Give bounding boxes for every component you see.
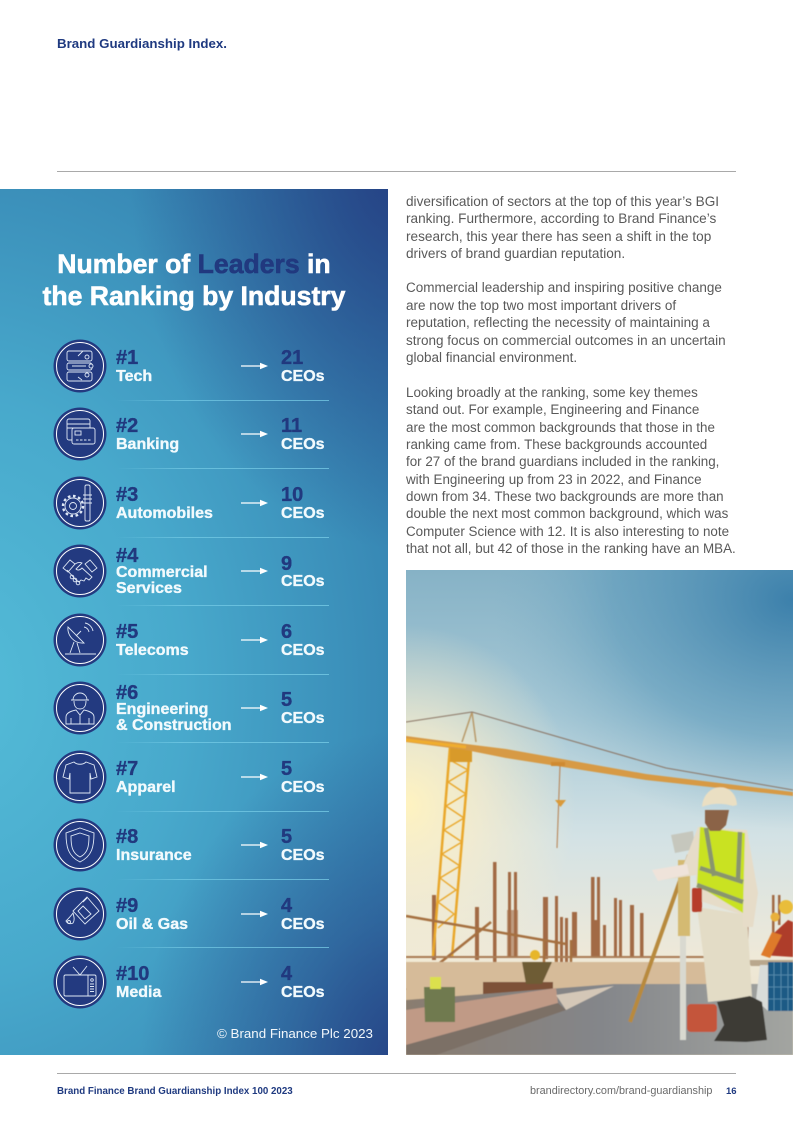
row 7: Apparel xyxy=(54,750,325,804)
row 6: Engineering & Construction: #6 xyxy=(116,682,138,704)
row 6: Engineering & Construction: 5 xyxy=(281,689,292,711)
mid worker xyxy=(530,950,540,960)
row 9: Oil & Gas xyxy=(54,888,325,940)
row 10: Media xyxy=(54,956,325,1008)
panel heading: the Ranking by Industry xyxy=(43,281,345,311)
boots xyxy=(714,996,767,1042)
arrow xyxy=(241,636,268,644)
row 6: Engineering & Construction xyxy=(54,682,325,734)
arrow xyxy=(241,362,268,370)
row 6: Engineering & Construction: Engineering xyxy=(116,701,208,718)
body text paragraph 2 xyxy=(406,280,726,365)
vest xyxy=(697,827,745,913)
row 2: Banking xyxy=(54,408,325,460)
row 3: Automobiles: #3 xyxy=(116,484,138,506)
header title: Brand Guardianship Index. xyxy=(57,36,227,51)
row 7: Apparel: Apparel xyxy=(116,779,176,796)
row 3: Automobiles xyxy=(54,476,325,530)
icon: television xyxy=(54,956,106,1008)
body text paragraph 2: global financial environment. xyxy=(406,350,577,365)
row 5: Telecoms: 6 xyxy=(281,621,292,643)
row 3: Automobiles: Automobiles xyxy=(116,505,213,522)
arrow xyxy=(241,910,268,918)
body text paragraph 2: Commercial leadership and inspiring positive change xyxy=(406,280,722,295)
row 2: Banking: 11 xyxy=(281,415,302,437)
icon: shield xyxy=(54,818,106,872)
row 4: Commercial Services xyxy=(54,544,325,598)
body text paragraph 3: ranking came from. These backgrounds accounted xyxy=(406,437,707,452)
row 7: Apparel: 5 xyxy=(281,758,292,780)
rebar columns xyxy=(432,862,780,982)
row 9: Oil & Gas: #9 xyxy=(116,895,138,917)
body text paragraph 3: Looking broadly at the ranking, some key themes xyxy=(406,385,698,400)
row 5: Telecoms: CEOs xyxy=(281,642,325,659)
body text paragraph 1: ranking. Furthermore, according to Brand Finance’s xyxy=(406,211,716,226)
arrow xyxy=(241,774,268,780)
body text paragraph 2: are now the top two most important drivers of xyxy=(406,298,676,312)
scaffold poles xyxy=(406,916,726,995)
row 10: Media: 4 xyxy=(281,963,292,985)
photo: surveyor on construction site with crane xyxy=(406,570,793,1055)
icon: construction worker xyxy=(54,682,106,734)
row 8: Insurance: 5 xyxy=(281,826,292,848)
row 10: Media: #10 xyxy=(116,963,149,985)
icon: t-shirt xyxy=(54,750,106,804)
row 3: Automobiles: 10 xyxy=(281,484,303,506)
tripod xyxy=(630,855,689,1022)
body text paragraph 3: are the most common backgrounds that those in the xyxy=(406,420,715,435)
body text paragraph 3: for 27 of the brand guardians included in the ranking, xyxy=(406,454,719,469)
row 1: Tech: Tech xyxy=(116,368,152,385)
row 2: Banking: CEOs xyxy=(281,436,325,453)
row 8: Insurance: CEOs xyxy=(281,847,325,864)
body text paragraph 1 xyxy=(406,194,719,261)
bucket xyxy=(424,987,455,1022)
row 3: Automobiles: CEOs xyxy=(281,505,325,522)
crane jib xyxy=(406,736,793,796)
row 8: Insurance xyxy=(54,818,325,872)
body text paragraph 1: diversification of sectors at the top of this year’s BGI xyxy=(406,194,719,209)
row 4: Commercial Services: CEOs xyxy=(281,573,325,590)
row 6: Engineering & Construction: CEOs xyxy=(281,710,325,727)
footer left text: Brand Finance Brand Guardianship Index 100 2023 xyxy=(57,1086,293,1097)
crane hook xyxy=(557,766,560,848)
icon: satellite dish xyxy=(54,614,106,666)
icon: gear and piston xyxy=(54,476,106,530)
body text paragraph 1: research, this year there has seen a shift in the top xyxy=(406,229,711,244)
clipboard xyxy=(652,864,689,881)
row 10: Media: Media xyxy=(116,984,161,1001)
panel heading xyxy=(42,249,346,311)
row 5: Telecoms: #5 xyxy=(116,621,138,643)
body text paragraph 3: stand out. For example, Engineering and Finance xyxy=(406,402,699,417)
icon: jerrycan and drop xyxy=(54,888,106,940)
body text paragraph 3: Computer Science with 12. It is also interesting to note xyxy=(406,524,729,539)
row 8: Insurance: #8 xyxy=(116,826,138,848)
red case xyxy=(687,1004,717,1032)
body text paragraph 2: reputation, reflecting the necessity of maintaining a xyxy=(406,315,710,330)
row 4: Commercial Services: Commercial xyxy=(116,564,208,581)
body text paragraph 1: drivers of brand guardian reputation. xyxy=(406,246,625,261)
body text paragraph 3: down from 34. These two backgrounds are more than xyxy=(406,489,724,504)
crane mast xyxy=(433,712,476,957)
row 1: Tech xyxy=(54,340,325,392)
body text paragraph 2: strong focus on commercial outcomes in an uncertain xyxy=(406,332,726,348)
wall and floor xyxy=(406,962,726,1010)
row 9: Oil & Gas: Oil & Gas xyxy=(116,916,188,933)
body text paragraph 3: with Engineering up from 23 in 2022, and Finance xyxy=(406,472,702,487)
panel: number of leaders by industry xyxy=(0,189,388,1055)
body text paragraph 3 xyxy=(406,385,736,556)
arrow xyxy=(241,430,268,438)
row 10: Media: CEOs xyxy=(281,984,325,1001)
row 5: Telecoms xyxy=(54,614,325,666)
row 1: Tech: 21 xyxy=(281,347,303,369)
row 9: Oil & Gas: 4 xyxy=(281,895,292,917)
row 7: Apparel: #7 xyxy=(116,758,138,780)
arrow xyxy=(241,842,268,848)
footer website: brandirectory.com/brand-guardianship xyxy=(530,1085,712,1097)
row 1: Tech: CEOs xyxy=(281,368,325,385)
tool belt xyxy=(692,888,702,912)
row 2: Banking: #2 xyxy=(116,415,138,437)
arrow xyxy=(241,500,268,506)
row 5: Telecoms: Telecoms xyxy=(116,642,189,659)
arrow xyxy=(241,978,268,986)
panel heading: Number of Leaders in xyxy=(57,249,331,279)
copyright note: © Brand Finance Plc 2023 xyxy=(217,1026,373,1041)
arrow xyxy=(241,704,268,712)
blue crate xyxy=(768,962,793,1011)
row 1: Tech: #1 xyxy=(116,347,138,369)
icon: handshake xyxy=(54,544,106,598)
row 6: Engineering & Construction: & Construction xyxy=(116,717,232,734)
row 2: Banking: Banking xyxy=(116,436,179,453)
row 9: Oil & Gas: CEOs xyxy=(281,916,325,933)
shirt xyxy=(655,827,758,927)
row 4: Commercial Services: 9 xyxy=(281,553,292,575)
icon: circuit xyxy=(54,340,106,392)
hardhat and head xyxy=(705,810,729,831)
row 8: Insurance: Insurance xyxy=(116,847,192,864)
page number: 16 xyxy=(726,1086,737,1097)
row 4: Commercial Services: #4 xyxy=(116,545,138,567)
trousers xyxy=(697,907,752,1002)
icon: bank cards xyxy=(54,408,106,460)
row 4: Commercial Services: Services xyxy=(116,580,182,597)
arrow xyxy=(241,568,268,574)
row 7: Apparel: CEOs xyxy=(281,779,325,796)
body text paragraph 3: double the next most common background, which was xyxy=(406,506,728,521)
right workers xyxy=(779,900,793,914)
body text paragraph 3: that not all, but 42 of those in the ranking have an MBA. xyxy=(406,541,736,556)
